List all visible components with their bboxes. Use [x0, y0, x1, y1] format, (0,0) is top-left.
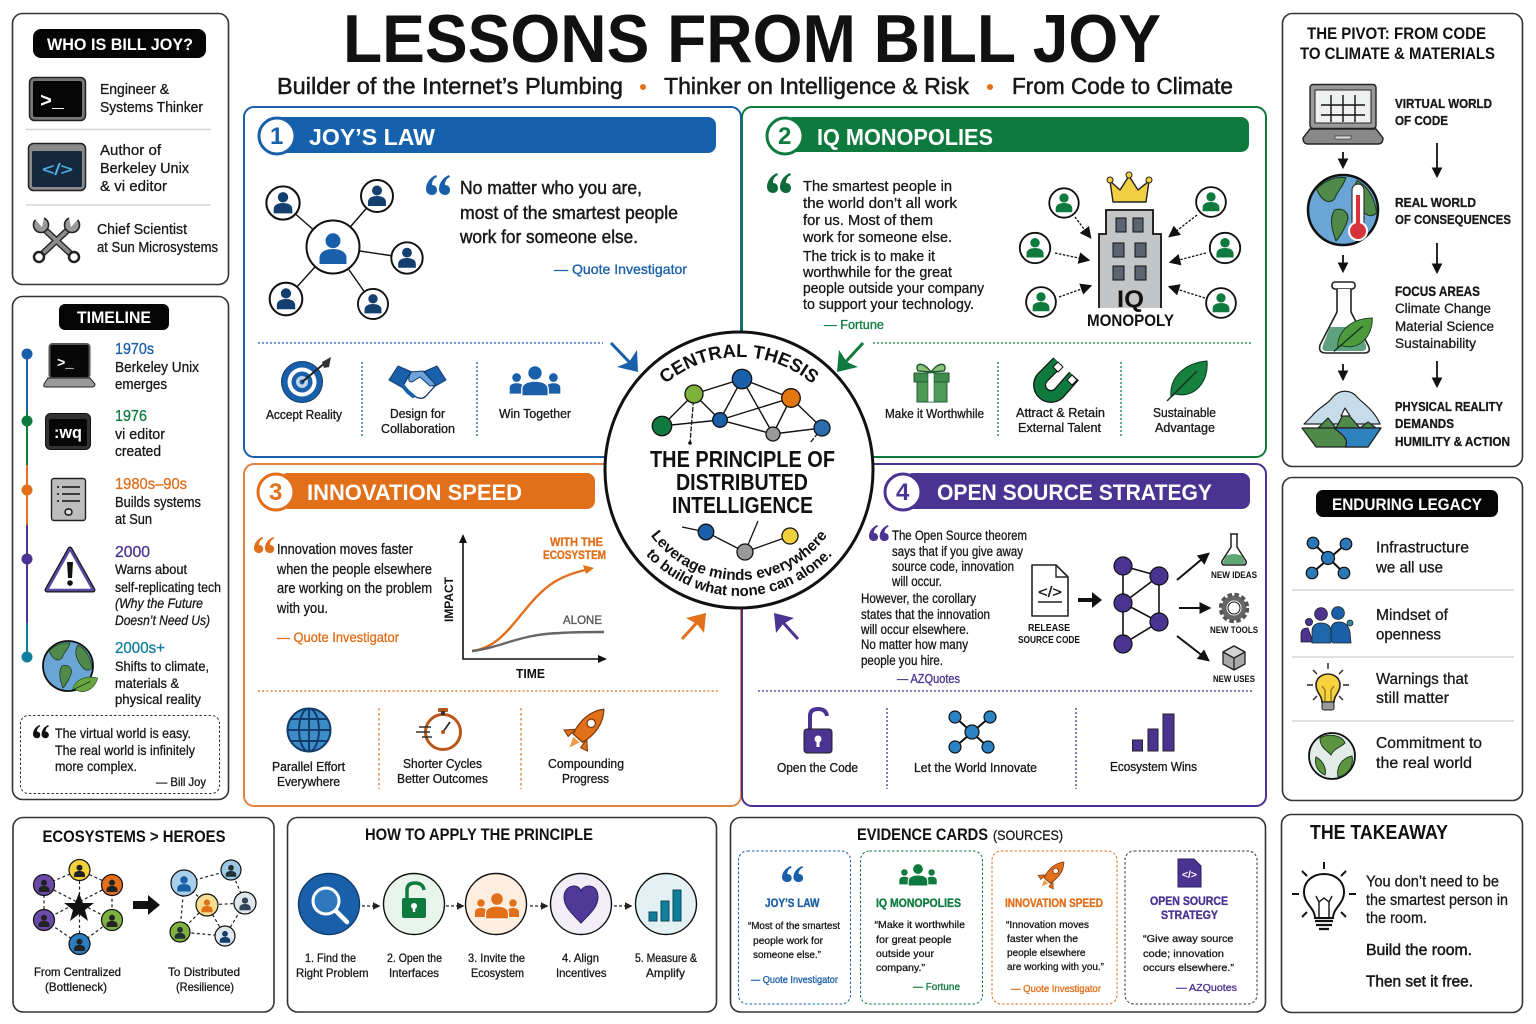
title: LESSONS FROM BILL JOY — [343, 1, 1161, 77]
panel: the takeaway — [1282, 814, 1522, 1012]
panel: the pivot — [1282, 14, 1522, 466]
heading: how to apply: HOW TO APPLY THE PRINCIPLE — [365, 826, 593, 844]
icon: warning triangle — [47, 549, 93, 590]
icon: open lock — [804, 709, 832, 753]
heading: principle of distributed intelligence: DISTRIBUTED — [676, 469, 808, 495]
panel 3: Innovation Speed — [244, 464, 741, 806]
text: 1970s: Berkeley Unix — [115, 359, 199, 376]
callout: Bill Joy quote: The virtual world is easy. — [55, 725, 191, 741]
label: sustainable advantage: Sustainable — [1153, 406, 1216, 420]
text: author: & vi editor — [100, 178, 167, 195]
heading: principle of distributed intelligence: INTELLIGENCE — [672, 492, 813, 518]
callout: Bill Joy quote: — Bill Joy — [156, 775, 206, 789]
text: mindset — [1376, 607, 1449, 644]
chart: impact over time: WITH THE — [550, 535, 603, 549]
header: IQ Monopolies: 2 — [778, 123, 791, 150]
card: Joy's Law: someone else.” — [753, 949, 821, 961]
heading: principle of distributed intelligence — [650, 446, 835, 518]
card: Joy's Law: people work for — [753, 935, 823, 947]
arrow: green to centre — [837, 343, 863, 372]
quote: Open Source: people you hire. — [861, 653, 943, 668]
illustration: IQ monopoly building: IQ — [1117, 286, 1144, 313]
icon: leaf — [1167, 361, 1207, 401]
arrow: orange to centre — [682, 613, 706, 639]
text: takeaway message: the room. — [1366, 910, 1427, 927]
chart: impact over time: ALONE — [563, 613, 602, 627]
quote: Innovation Speed — [254, 537, 432, 645]
label: compounding progress — [548, 757, 624, 786]
text: takeaway message: You don’t need to be — [1366, 874, 1499, 890]
text: 2000: (Why the Future — [115, 595, 203, 611]
card: Open Source Strategy: OPEN SOURCE — [1150, 896, 1228, 908]
label: parallel effort: Parallel Effort — [272, 760, 346, 774]
card: Open Source Strategy — [1125, 851, 1257, 1004]
heading: principle of distributed intelligence: THE PRINCIPLE OF — [650, 446, 835, 472]
quote: Open Source — [860, 525, 1027, 686]
icon: vi editor: :wq — [54, 423, 82, 442]
text: 1970s: emerges — [115, 376, 167, 393]
diagram: distributed — [170, 860, 256, 946]
quote: IQ Monopolies: to support your technology. — [803, 297, 974, 313]
text: chief scientist — [97, 221, 218, 256]
chart: impact over time: ECOSYSTEM — [543, 548, 606, 562]
text: chief scientist: at Sun Microsystems — [97, 239, 218, 256]
text: 1970s: 1970s — [115, 341, 154, 358]
step 3: invite the ecosystem: 3. Invite the — [468, 951, 525, 965]
icon: new uses cube — [1213, 646, 1255, 685]
card: Open Source Strategy: — AZQuotes — [1176, 982, 1237, 994]
header: Joy's Law: JOY’S LAW — [309, 124, 435, 150]
text: 2000s+: 2000s+ — [115, 640, 165, 657]
heading: timeline: TIMELINE — [77, 308, 151, 327]
icon: source code document: SOURCE CODE — [1018, 634, 1080, 646]
text: infrastructure: we all use — [1375, 560, 1443, 576]
text: physical reality: HUMILITY & ACTION — [1395, 434, 1510, 449]
panel: ecosystems over heroes — [13, 818, 274, 1012]
quote: Innovation Speed: with you. — [276, 601, 328, 617]
label: design for collaboration — [381, 407, 455, 436]
icon: network — [949, 711, 996, 753]
icon: source code document: </> — [1038, 584, 1062, 601]
step 5: measure and amplify: 5. Measure & — [635, 951, 697, 965]
text: engineer — [100, 81, 203, 116]
icon: laptop — [44, 344, 95, 387]
heading: timeline — [59, 304, 169, 330]
text: focus areas: FOCUS AREAS — [1395, 284, 1480, 299]
quote: Open Source: will occur. — [891, 574, 942, 589]
text: 1980s-90s — [115, 476, 201, 528]
icon: code window — [28, 144, 86, 190]
text: warnings: still matter — [1376, 690, 1449, 707]
panel 4: Open Source Strategy — [742, 464, 1266, 806]
quote: IQ Monopolies: people outside your company — [803, 281, 985, 297]
quote: Open Source: No matter how many — [861, 637, 968, 652]
icon: globe with leaf — [43, 641, 98, 699]
quote: Open Source: says that if you give away — [892, 544, 1023, 559]
quote: Joy's Law: No matter who you are, — [460, 178, 642, 198]
heading: who is Bill Joy: WHO IS BILL JOY? — [47, 35, 193, 54]
card: Innovation Speed: faster when the — [1007, 933, 1078, 945]
text: focus areas: Climate Change — [1395, 301, 1491, 316]
quote: IQ Monopolies: work for someone else. — [802, 230, 952, 246]
step 4: align incentives: Incentives — [556, 966, 606, 980]
subtitle: Builder of the Internet’s Plumbing — [277, 73, 623, 99]
text: 2000s+: materials & — [115, 675, 180, 691]
card: IQ Monopolies: — Fortune — [913, 981, 960, 993]
text: real world: OF CONSEQUENCES — [1395, 212, 1511, 227]
labels: centralized and distributed: To Distributed — [168, 965, 240, 979]
subtitle: From Code to Climate — [1012, 73, 1233, 99]
icon: target — [282, 357, 331, 402]
text: physical reality: DEMANDS — [1395, 416, 1454, 431]
label: parallel effort — [272, 760, 346, 789]
card: Innovation Speed: people elsewhere — [1007, 947, 1086, 959]
label: open the code: Open the Code — [777, 761, 858, 775]
label: compounding progress: Progress — [562, 772, 609, 786]
step 1: find the right problem: Right Problem — [296, 966, 369, 980]
text: focus areas — [1395, 284, 1494, 351]
label: shorter cycles: Better Outcomes — [397, 772, 488, 786]
central thesis circle — [604, 330, 874, 610]
text: takeaway message — [1366, 874, 1508, 990]
card: IQ Monopolies: for great people — [876, 934, 952, 946]
card: Open Source Strategy: code; innovation — [1143, 948, 1224, 960]
icon: terminal — [30, 78, 86, 120]
icon: laptop with code — [1303, 84, 1383, 144]
icon: source code document — [1018, 565, 1080, 646]
label: design for collaboration: Collaboration — [381, 422, 455, 436]
card: IQ Monopolies: outside your — [876, 948, 935, 960]
panel: how to apply the principle — [288, 818, 716, 1012]
label: shorter cycles — [397, 757, 488, 786]
text: engineer: Systems Thinker — [100, 99, 203, 116]
heading: who is Bill Joy — [33, 29, 206, 58]
text: takeaway message: Then set it free. — [1366, 974, 1473, 990]
icon: mountains and water — [1302, 391, 1381, 447]
arrows: step flow — [362, 905, 631, 907]
step 2: open the interfaces: 2. Open the — [387, 951, 442, 965]
quote: Open Source: source code, innovation — [892, 559, 1014, 574]
arrows: pivot flow — [1343, 143, 1437, 386]
heading: enduring legacy — [1316, 490, 1498, 517]
heading: evidence cards: EVIDENCE CARDS — [857, 826, 988, 844]
curved tagline: Leverage minds everywhere — [651, 530, 826, 580]
illustration: IQ monopoly building — [1020, 172, 1240, 330]
quote: IQ Monopolies: The trick is to make it — [803, 249, 935, 265]
chart: impact over time — [442, 534, 607, 681]
quote: IQ Monopolies: the world don’t all work — [803, 196, 958, 212]
quote: IQ Monopolies: The smartest people in — [803, 179, 952, 195]
text: 2000: Doesn’t Need Us) — [115, 612, 210, 628]
text: commitment: the real world — [1376, 755, 1472, 772]
text: real world: REAL WORLD — [1395, 195, 1476, 210]
icon: crossed wrenches — [32, 213, 81, 262]
quote: IQ Monopolies: — Fortune — [824, 317, 884, 332]
card: Joy's Law: — Quote Investigator — [751, 974, 838, 986]
icon: magnet — [1040, 362, 1077, 396]
quote: Open Source: The Open Source theorem — [892, 528, 1027, 543]
quote: IQ Monopolies: for us. Most of them — [803, 213, 933, 229]
text: warnings — [1376, 671, 1469, 707]
panel: timeline — [12, 296, 228, 800]
card: Joy's Law — [738, 851, 850, 1004]
arrow: blue to centre — [611, 343, 638, 372]
header: Innovation Speed: INNOVATION SPEED — [307, 480, 522, 505]
labels: centralized and distributed — [34, 965, 240, 994]
icon: new ideas flask: NEW IDEAS — [1211, 570, 1257, 581]
labels: centralized and distributed: From Centralized — [34, 965, 121, 979]
quote: Open Source: will occur elsewhere. — [860, 622, 969, 637]
step 4: align incentives: 4. Align — [562, 951, 599, 965]
card: Innovation Speed: INNOVATION SPEED — [1005, 898, 1103, 910]
label: attract and retain — [1016, 406, 1105, 435]
card: Open Source Strategy: “Give away source — [1143, 933, 1234, 945]
header: Open Source Strategy — [885, 473, 1250, 510]
header: Innovation Speed — [258, 473, 595, 510]
text: physical reality: PHYSICAL REALITY — [1395, 399, 1503, 414]
text: 2000: Warns about — [115, 561, 187, 577]
text: physical reality — [1395, 399, 1510, 449]
card: Open Source Strategy: occurs elsewhere.” — [1143, 962, 1235, 974]
network of people — [266, 180, 423, 319]
text: 1976: 1976 — [115, 408, 147, 425]
curved heading: central thesis: CENTRAL THESIS — [660, 344, 818, 382]
text: infrastructure: Infrastructure — [1376, 540, 1469, 556]
icon: new tools gear: NEW TOOLS — [1210, 625, 1258, 636]
step 2: open the interfaces: Interfaces — [389, 966, 439, 980]
label: parallel effort: Everywhere — [277, 775, 340, 789]
panel 1: Joy's Law — [244, 107, 741, 457]
text: 1980s-90s: 1980s–90s — [115, 476, 187, 493]
arrow: code to network — [1078, 592, 1102, 608]
label: shorter cycles: Shorter Cycles — [403, 757, 482, 771]
callout: Bill Joy quote: more complex. — [55, 758, 137, 774]
icon: globe grid — [288, 708, 331, 752]
label: sustainable advantage — [1153, 406, 1216, 435]
card: Innovation Speed: are working with you.” — [1007, 961, 1104, 973]
panel: who is Bill Joy — [12, 14, 228, 284]
chart: impact over time: TIME — [516, 666, 545, 681]
label: accept reality: Accept Reality — [266, 408, 343, 422]
icon: new ideas flask — [1211, 534, 1257, 581]
lower network — [682, 521, 798, 560]
text: 2000 — [115, 544, 221, 628]
text: commitment — [1376, 735, 1482, 772]
text: 2000: self-replicating tech — [115, 579, 221, 595]
icon: handshake — [389, 366, 446, 398]
text: author: Berkeley Unix — [100, 160, 189, 177]
icon: gift — [914, 364, 949, 402]
icon: terminal: >_ — [40, 91, 65, 114]
text: 2000s+: physical reality — [115, 691, 201, 707]
text: 1976: created — [115, 443, 161, 460]
label: sustainable advantage: Advantage — [1155, 421, 1215, 435]
text: real world — [1395, 195, 1511, 227]
text: takeaway message: Build the room. — [1366, 942, 1472, 959]
quote: Innovation Speed: when the people elsewhere — [276, 562, 432, 578]
text: 2000s+: Shifts to climate, — [115, 658, 209, 674]
card: IQ Monopolies — [860, 851, 982, 1004]
card: IQ Monopolies: “Make it worthwhile — [874, 919, 965, 931]
icon: light bulb — [1307, 663, 1349, 710]
quote: Innovation Speed: Innovation moves faster — [277, 542, 413, 558]
subtitle — [277, 73, 1233, 99]
card: Innovation Speed: “Innovation moves — [1006, 919, 1089, 931]
text: focus areas: Sustainability — [1395, 336, 1476, 351]
icon: new uses cube: NEW USES — [1213, 674, 1255, 685]
quote: Joy's Law: most of the smartest people — [460, 203, 678, 223]
text: 1980s-90s: at Sun — [115, 511, 152, 528]
icon: bars — [1132, 714, 1174, 751]
card: Joy's Law: “Most of the smartest — [748, 920, 840, 932]
quote: Open Source: — AZQuotes — [897, 671, 960, 686]
card: Innovation Speed: — Quote Investigator — [1011, 983, 1101, 995]
icon: server — [52, 478, 86, 520]
heading: evidence cards: (SOURCES) — [993, 827, 1063, 843]
quote: Innovation Speed: are working on the problem — [277, 581, 432, 597]
label: design for collaboration: Design for — [390, 407, 445, 421]
arrow: centralized to distributed — [133, 895, 160, 915]
labels: centralized and distributed: (Bottleneck) — [45, 980, 107, 994]
upper network — [652, 369, 830, 445]
step 4: align incentives — [550, 874, 612, 980]
icon: globe with thermometer — [1308, 175, 1378, 245]
text: commitment: Commitment to — [1376, 735, 1482, 752]
text: mindset: openness — [1376, 626, 1441, 644]
timeline rail — [22, 348, 32, 662]
step 1: find the right problem: 1. Find the — [305, 951, 356, 965]
text: 1970s — [115, 341, 199, 393]
icon: code window: </> — [42, 160, 73, 179]
icon: vi editor — [46, 414, 90, 450]
heading: ecosystems over heroes: ECOSYSTEMS > HEROES — [42, 827, 226, 846]
text: warnings: Warnings that — [1376, 671, 1469, 688]
quote: Joy's Law: work for someone else. — [459, 227, 638, 247]
icon: flask with leaf — [1320, 282, 1372, 354]
text: focus areas: Material Science — [1395, 319, 1494, 334]
icon: laptop: >_ — [57, 356, 74, 372]
text: virtual world: OF CODE — [1395, 113, 1448, 128]
callout: Bill Joy quote — [20, 716, 220, 794]
quote: IQ Monopolies — [767, 173, 985, 332]
heading: the pivot — [1300, 25, 1495, 63]
card: Joy's Law: JOY’S LAW — [765, 898, 820, 910]
illustration: IQ monopoly building: MONOPOLY — [1087, 312, 1174, 330]
text: 1976 — [115, 408, 165, 460]
label: let the world innovate: Let the World Innovate — [914, 761, 1037, 775]
heading: the pivot: TO CLIMATE & MATERIALS — [1300, 45, 1495, 63]
text: virtual world: VIRTUAL WORLD — [1395, 96, 1492, 111]
card: Open Source Strategy: STRATEGY — [1161, 910, 1218, 922]
label: ecosystem wins: Ecosystem Wins — [1110, 760, 1197, 774]
quote: Joy's Law — [426, 175, 687, 277]
label: win together: Win Together — [499, 407, 571, 421]
labels: centralized and distributed: (Resilience) — [176, 980, 234, 994]
panel: evidence cards — [730, 818, 1266, 1012]
icon: stopwatch — [416, 708, 460, 750]
icon: team — [510, 366, 560, 396]
chart: impact over time: IMPACT — [442, 576, 456, 622]
card: Innovation Speed — [992, 851, 1117, 1004]
card: IQ Monopolies: company.” — [876, 962, 926, 974]
heading: enduring legacy: ENDURING LEGACY — [1332, 495, 1483, 514]
text: 1976: vi editor — [115, 426, 165, 443]
heading: the takeaway: THE TAKEAWAY — [1310, 822, 1449, 844]
step 3: invite the ecosystem: Ecosystem — [471, 966, 524, 980]
panel 2: IQ Monopolies — [742, 107, 1266, 457]
panel: enduring legacy — [1282, 478, 1522, 800]
text: chief scientist: Chief Scientist — [97, 221, 188, 238]
step 2: open the interfaces — [384, 874, 444, 980]
icon: rocket — [558, 699, 616, 758]
header: Joy's Law: 1 — [270, 123, 283, 150]
text: takeaway message: the smartest person in — [1366, 892, 1508, 909]
arrows: outcomes — [1177, 554, 1209, 660]
callout: Bill Joy quote: The real world is infinitely — [55, 742, 195, 758]
label: attract and retain: External Talent — [1018, 421, 1102, 435]
text: author: Author of — [100, 142, 162, 159]
icon: new tools gear — [1210, 594, 1258, 636]
label: make it worthwhile: Make it Worthwhile — [885, 407, 984, 421]
quote: Innovation Speed: — Quote Investigator — [277, 629, 399, 645]
quote: Joy's Law: — Quote Investigator — [554, 261, 687, 277]
icon: outline bulb — [1292, 862, 1356, 929]
header: Innovation Speed: 3 — [269, 479, 282, 506]
quote: Open Source: states that the innovation — [861, 607, 990, 622]
diagram: purple network — [1114, 557, 1168, 653]
header: Open Source Strategy: OPEN SOURCE STRATEGY — [937, 480, 1212, 505]
text: 2000s+ — [115, 640, 209, 707]
text: engineer: Engineer & — [100, 81, 169, 98]
header: Joy's Law — [259, 117, 716, 154]
quote: IQ Monopolies: worthwhile for the great — [802, 265, 952, 281]
step 5: measure and amplify: Amplify — [646, 966, 685, 980]
text: 2000: 2000 — [115, 544, 150, 561]
step 1: find the right problem — [296, 874, 369, 980]
quote: Open Source: However, the corollary — [861, 591, 976, 606]
text: 1980s-90s: Builds systems — [115, 494, 201, 511]
icon: mindset group — [1301, 607, 1353, 643]
text: infrastructure — [1375, 540, 1469, 576]
label: attract and retain: Attract & Retain — [1016, 406, 1105, 420]
card: IQ Monopolies: IQ MONOPOLIES — [876, 898, 961, 910]
text: virtual world — [1395, 96, 1492, 128]
arrow: purple to centre — [774, 613, 798, 639]
header: IQ Monopolies: IQ MONOPOLIES — [817, 124, 993, 150]
curved tagline: to build what none can alone. — [647, 549, 832, 596]
text: mindset: Mindset of — [1376, 607, 1449, 624]
text: author — [100, 142, 189, 195]
step 3: invite the ecosystem — [466, 874, 526, 980]
header: IQ Monopolies — [767, 117, 1249, 154]
icon: source code document: RELEASE — [1028, 622, 1070, 634]
label: compounding progress: Compounding — [548, 757, 624, 771]
diagram: centralized — [34, 860, 122, 954]
subtitle: Thinker on Intelligence & Risk — [664, 73, 969, 99]
header: Open Source Strategy: 4 — [896, 479, 910, 506]
heading: the pivot: THE PIVOT: FROM CODE — [1307, 25, 1486, 43]
card: Open Source Strategy: </> — [1182, 870, 1197, 881]
icon: infrastructure network — [1306, 537, 1352, 579]
step 5: measure and amplify — [635, 874, 697, 980]
icon: earth with leaves — [1309, 733, 1355, 779]
